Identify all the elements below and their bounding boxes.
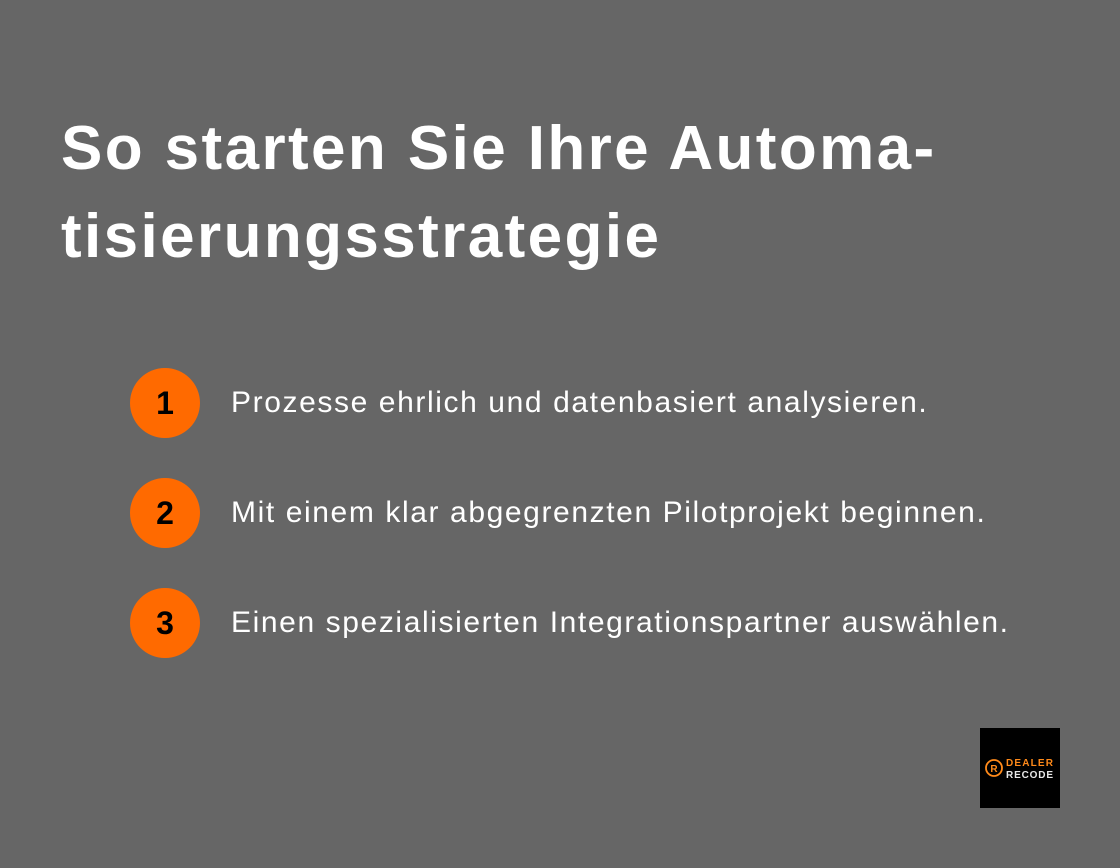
title: So starten Sie Ihre Automa- [61,114,937,183]
step 3 text: Einen spezialisierten Integrationspartner auswählen. [231,606,1010,639]
step 3 [130,588,1010,658]
step 2 [130,478,986,548]
number badge 1 [130,368,200,438]
logo: Dealer Recode: RECODE [1006,770,1053,781]
step 1 [130,368,928,438]
title [61,114,937,271]
logo: Dealer Recode: R [990,764,998,775]
logo: Dealer Recode: DEALER [1006,758,1054,769]
step 1 text: Prozesse ehrlich und datenbasiert analysieren. [231,386,928,419]
number badge 1: 1 [156,384,174,420]
step 2 text: Mit einem klar abgegrenzten Pilotprojekt beginnen. [231,496,986,529]
number badge 2: 2 [156,494,174,530]
number badge 3 [130,588,200,658]
number badge 3: 3 [156,604,174,640]
number badge 2 [130,478,200,548]
logo: Dealer Recode [980,728,1060,808]
title: tisierungsstrategie [61,202,661,271]
